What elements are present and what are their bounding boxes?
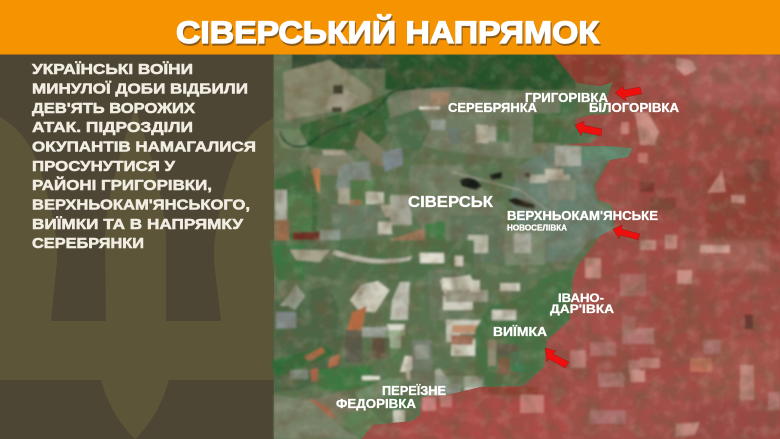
text block: situation summary <box>32 61 256 252</box>
text block: situation summary: МИНУЛОЇ ДОБИ ВІДБИЛИ <box>32 80 248 98</box>
map terrain: dark ponds and river <box>280 82 560 220</box>
text block: situation summary: ВИЇМКИ ТА В НАПРЯМКУ <box>32 216 244 233</box>
label: Siversk: СІВЕРСЬК <box>408 194 494 211</box>
text block: situation summary: ВЕРХНЬОКАМ'ЯНСЬКОГО, <box>32 196 250 214</box>
label: Ivano-Darivka <box>550 291 614 316</box>
text block: situation summary: ПРОСУНУТИСЯ У <box>32 158 176 175</box>
arrow: toward Viimka <box>545 348 569 368</box>
text block: situation summary: ОКУПАНТІВ НАМАГАЛИСЯ <box>32 138 256 156</box>
text block: situation summary: ДЕВ'ЯТЬ ВОРОЖИХ <box>32 100 195 117</box>
map overlay: occupied territory in red <box>362 54 780 439</box>
text block: situation summary: СЕРЕБРЯНКИ <box>32 235 144 252</box>
map texture: light satellite speckle <box>274 54 780 439</box>
label: Hryhorivka: ГРИГОРІВКА <box>525 91 608 105</box>
map: satellite view with occupied territory <box>270 54 780 439</box>
label: Novoselivka: НОВОСЕЛІВКА <box>507 224 567 232</box>
text block: situation summary: АТАК. ПІДРОЗДІЛИ <box>32 119 193 136</box>
icon: trident watermark <box>0 108 275 439</box>
map terrain: fields inside occupied territory <box>400 54 780 439</box>
header: orange title banner <box>0 0 780 54</box>
label: Bilohorivka: БІЛОГОРІВКА <box>589 101 679 115</box>
map texture: dark satellite speckle <box>274 54 780 439</box>
label: Verkhnokamianske: ВЕРХНЬОКАМ'ЯНСЬКЕ <box>507 209 658 223</box>
title: СІВЕРСЬКИЙ НАПРЯМОК <box>176 14 600 50</box>
panel: left text panel <box>0 54 275 439</box>
map terrain: Ukrainian-held fields and forest <box>270 54 633 439</box>
label: Pereizne: ПЕРЕЇЗНЕ <box>382 383 446 398</box>
label: Viimka: ВИЇМКА <box>493 324 547 339</box>
arrow: south of Hryhorivka <box>575 121 602 136</box>
text block: situation summary: УКРАЇНСЬКІ ВОЇНИ <box>32 61 193 78</box>
label: Serebrianka: СЕРЕБРЯНКА <box>448 101 537 115</box>
label: Ivano-Darivka: ДАР'ІВКА <box>550 302 614 316</box>
label: Fedorivka: ФЕДОРІВКА <box>336 397 416 411</box>
text block: situation summary: РАЙОНІ ГРИГОРІВКИ, <box>32 176 212 194</box>
label: Ivano-Darivka: ІВАНО- <box>558 291 604 305</box>
arrow: toward Hryhorivka <box>615 86 642 101</box>
arrow: toward Verkhnokamianske <box>613 225 640 240</box>
